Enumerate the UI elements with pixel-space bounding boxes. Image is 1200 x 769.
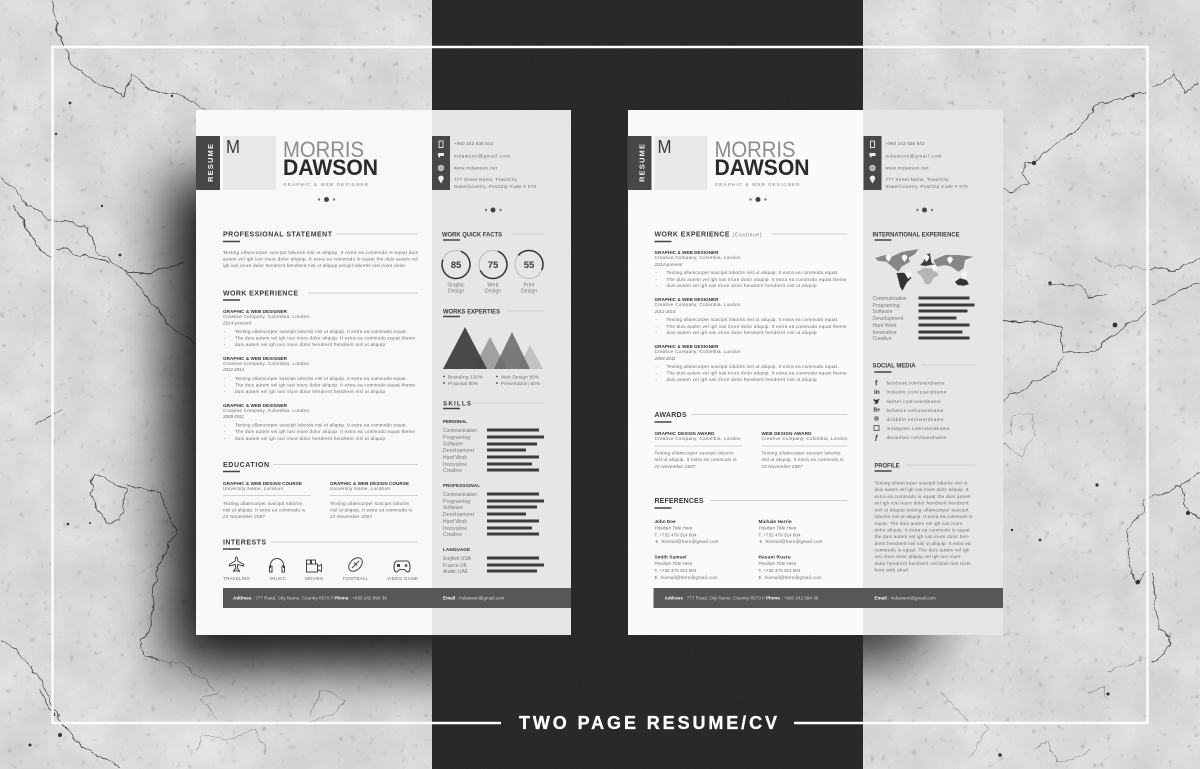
profile body: commodo is equat. The duis autem vel igh (874, 548, 970, 552)
professional statement (223, 232, 419, 268)
interest labels (223, 576, 418, 581)
contact text: +960 242 936 843 (886, 141, 925, 146)
job 1: 2014-present (654, 262, 683, 267)
reference: Smith Samuel: T. +732 479 314 604 (654, 568, 697, 573)
personal skills: Development (443, 448, 475, 454)
contact text: State/Country, Post/Zip Code # 570 (886, 184, 968, 189)
social links: ƒ (874, 434, 878, 442)
professional skills: Software (443, 505, 463, 511)
job 2: duis autem vel igh iusi iriure dolor hendrerit hendrerit nisl ut aliquip (666, 330, 817, 335)
reference: John Doe: Position Title Here (654, 525, 693, 530)
footer bar (654, 588, 1003, 608)
education: University Name, Location (330, 486, 390, 491)
personal skills: PERSONAL (443, 419, 467, 424)
education: University Name, Location (223, 486, 283, 491)
skill bars: Development (872, 316, 904, 322)
resume tab (196, 136, 220, 190)
social links: in (874, 389, 880, 396)
social links: twitter.com/userdname (886, 399, 941, 404)
work quick facts (438, 231, 549, 294)
work experience continued: WORK EXPERIENCE (654, 232, 730, 239)
gauge 85: Graphic (448, 282, 465, 288)
job 3 (222, 403, 415, 441)
job 1: - (656, 270, 658, 275)
profile body: extra ea commodo is equat the duis autem (874, 494, 971, 499)
gauge 85: Design (448, 288, 464, 294)
skill bars: Communication (872, 296, 907, 302)
job 1: duis autem vel igh iusi iriure dolor hendrerit hendrerit nisl ut aliquip (666, 283, 817, 288)
footer bar: Address : 777 Road, City Name, Country 8570 // Phone : +960 242 894 39 (233, 596, 387, 601)
job 3: - (656, 370, 658, 375)
reference: Michale Harrie: E. hismail@here@gmail.com (760, 539, 823, 544)
gauge 55: 55 (524, 260, 535, 271)
job 2: - (656, 324, 658, 329)
reference: John Doe (654, 519, 719, 544)
pager dots (749, 197, 767, 202)
profile body: the duis autem vel igh iusi iriure dolor hen- (874, 534, 970, 539)
page 2 content (628, 136, 1003, 608)
job 1: The duis autem vel igh iusi iriure dolor aliquip. It extra ea commodo equat theme (666, 277, 847, 282)
job 1: - (656, 277, 658, 282)
awards: 23 November 2007 (654, 464, 696, 469)
logo box (223, 136, 276, 190)
social links: Be (874, 408, 880, 414)
language skills: English USA (443, 556, 472, 562)
pager dots right (485, 208, 502, 212)
chart legend: Web Design 80% (501, 374, 539, 379)
contact text: mdawson@gmail.com (454, 154, 510, 159)
gauge 55: Print (524, 282, 535, 288)
language skills (443, 547, 544, 575)
job 1: GRAPHIC & WEB DESIGNER (654, 250, 719, 255)
reference: John Doe: T. +732 479 314 604 (654, 532, 697, 537)
job 1: - (224, 342, 226, 347)
reference: Hasani Rustu: Position Title Here (758, 561, 797, 566)
contact text: 777 Street Name, Town/City (454, 177, 518, 182)
awards (654, 412, 848, 469)
social links (874, 380, 950, 442)
icon: headphones (270, 558, 284, 572)
reference: John Doe: E. hismail@here@gmail.com (656, 539, 719, 544)
reference: Michale Harrie: T. +732 479 314 604 (758, 532, 801, 537)
language skills: Arabic UAE (443, 569, 469, 575)
name (283, 137, 378, 187)
job 3: Creative Company, Colombia, London (223, 408, 309, 413)
job 3: Creative Company, Colombia, London (654, 349, 741, 354)
references: REFERENCES (654, 498, 704, 505)
job 3: Texting ullamcorper suscipit lobortis nisl ut aliquip. It extra ea commodo equat. (666, 364, 838, 369)
job 2: - (656, 317, 658, 322)
reference: Smith Samuel: Smith Samuel (654, 554, 686, 559)
interests (223, 540, 418, 581)
reference: Michale Harrie: Michale Harrie (758, 519, 792, 524)
gauge 75: Web (488, 282, 499, 288)
footer bar: Email : mdawson@gmail.com (874, 596, 936, 601)
name: GRAPHIC & WEB DESIGNER (283, 182, 369, 187)
personal skills: Hard Work (443, 455, 468, 461)
skill bars: Creative (872, 336, 892, 342)
profile (874, 462, 976, 572)
job 3: 2009-2011 (654, 356, 676, 361)
contact text: www.mdawson.net (886, 166, 929, 171)
job 3: Texting ullamcorper suscipit lobortis nisl ut aliquip. It extra ea commodo equat. (235, 422, 407, 427)
job 3: GRAPHIC & WEB DESIGNER (223, 403, 288, 408)
footer bar: Address : 777 Road, City Name, Country 8570 // Phone : +960 242 894 39 (664, 596, 819, 601)
job 2: 2012-2014 (654, 309, 676, 314)
chart legend: Branding 100% (448, 374, 483, 379)
profile: PROFILE (874, 462, 900, 469)
professional statement: Texting ullamcorper suscipit lobortis nisl ut aliquip. It extra ea commodo is equat duis (223, 250, 419, 255)
profile body: dolor aliquip. It extra ea commodo is equat (874, 528, 970, 532)
professional statement: PROFESSIONAL STATEMENT (223, 232, 333, 239)
works experties: WORKS EXPERTIES (443, 308, 500, 315)
education: 23 November 2007 (329, 514, 372, 519)
job 2: duis autem vel igh iusi iriure dolor hendrerit hendrerit nisl ut aliquip (235, 389, 385, 394)
name: MORRIS (714, 137, 796, 162)
job 1: duis autem vel igh iusi iriure dolor hendrerit hendrerit nisl ut aliquip (235, 342, 385, 347)
reference: John Doe: John Doe (654, 519, 676, 524)
work experience continued (654, 232, 848, 382)
job 1 (654, 250, 847, 288)
works experties (443, 308, 544, 386)
education: EDUCATION (223, 462, 269, 469)
profile body: drerit hendrerit nisl nisl ut aliquip. It extra ea (874, 541, 971, 546)
gauge 85: 85 (451, 260, 462, 271)
icon: movie camera (306, 560, 322, 572)
job 3: - (656, 364, 658, 369)
icon: football (346, 555, 365, 574)
resume tab: RESUME (638, 144, 646, 182)
education: Texting ullamcorper suscipit lobortis (223, 501, 303, 506)
profile body: duis autem vel igh iusi iriure dolor aliquip. It (874, 487, 969, 492)
contact text: mdawson@gmail.com (886, 154, 942, 159)
skill bars: Programing (872, 303, 900, 309)
job 3: - (656, 377, 658, 382)
resume tab: RESUME (206, 144, 215, 182)
job 2: - (224, 376, 226, 381)
social links: behance.net/userdname (886, 408, 944, 413)
job 2: Creative Company, Colombia, London (223, 361, 309, 366)
awards: Creative Company, Colombia, London (654, 436, 741, 441)
work experience (222, 291, 418, 441)
dark centre strip (432, 0, 863, 769)
job 2: - (224, 389, 226, 394)
interest labels: FOOTBALL (343, 576, 368, 581)
gauge 55 (509, 245, 549, 294)
skill bars: Innovative (872, 330, 897, 336)
skills (443, 400, 544, 575)
job 2: The duis autem vel igh iusi iriure dolor aliquip. It extra ea commodo equat theme (235, 382, 415, 387)
skill bars: Hard Work (872, 323, 897, 329)
contact text (454, 141, 536, 189)
job 2: The duis autem vel igh iusi iriure dolor aliquip. It extra ea commodo equat theme (666, 324, 847, 329)
reference: Hasani Rustu: E. hismail@here@gmail.com (758, 575, 822, 580)
contact text (886, 141, 968, 189)
awards: Texting ullamcorper suscipit lobortis (654, 450, 734, 455)
job 3 (654, 344, 847, 382)
personal skills: Communication (443, 428, 477, 434)
chart legend (443, 374, 540, 386)
job 1: 2014-present (222, 320, 252, 325)
education: 23 November 2007 (222, 514, 265, 519)
job 1: - (224, 335, 226, 340)
job 3: GRAPHIC & WEB DESIGNER (654, 344, 719, 349)
job 3: duis autem vel igh iusi iriure dolor hendrerit hendrerit nisl ut aliquip (666, 377, 817, 382)
pager dots right (916, 208, 933, 212)
awards: nisl ut aliquip. It extra ea commodo is (654, 457, 737, 462)
job 2: 2012-2014 (222, 367, 244, 372)
interest labels: VIDEO GAME (387, 576, 418, 581)
interest labels: MOVIES (305, 576, 323, 581)
name: MORRIS (283, 137, 364, 162)
job 1 (222, 309, 415, 347)
professional skills (443, 483, 544, 538)
reference: Michale Harrie (758, 519, 823, 544)
job 1: Texting ullamcorper suscipit lobortis nisl ut aliquip. It extra ea commodo equat. (666, 270, 838, 275)
awards: nisl ut aliquip. It extra ea commodo is (762, 457, 844, 462)
social media (872, 362, 976, 442)
chart legend: Proposal 80% (448, 381, 478, 386)
reference: Smith Samuel: E. hismail@here@gmail.com (654, 575, 718, 580)
work quick facts: WORK QUICK FACTS (442, 231, 502, 238)
language skills: LANGUAGE (443, 547, 470, 552)
name: DAWSON (714, 155, 810, 180)
contact text: 777 Street Name, Town/City (886, 177, 949, 182)
page 2 sheet (628, 110, 1003, 635)
footer bar (223, 588, 571, 608)
skill bars: Software (872, 309, 893, 315)
professional skills: Programing (443, 499, 470, 505)
awards: Texting ullamcorper suscipit lobortis (762, 450, 841, 455)
icon: game controller (394, 561, 410, 572)
personal skills: Innovative (443, 462, 467, 468)
awards: 23 November 2007 (760, 464, 803, 469)
title: two page resume: TWO PAGE RESUME/CV (519, 713, 777, 733)
education: Texting ullamcorper suscipit lobortis (330, 501, 410, 506)
awards: GRAPHIC DESIGN AWARD (654, 431, 715, 436)
international experience (872, 231, 974, 342)
job 1: Texting ullamcorper suscipit lobortis nisl ut aliquip. It extra ea commodo equat. (235, 329, 407, 334)
profile body: nisl ut aliquip texting ullamcorper suscipit (874, 508, 969, 512)
awards: AWARDS (654, 412, 687, 419)
education: nisl ut aliquip. It extra ea commodo is (223, 507, 306, 512)
job 1: GRAPHIC & WEB DESIGNER (223, 309, 288, 314)
job 2: Creative Company, Colombia, London (654, 302, 741, 307)
personal skills (443, 419, 544, 474)
profile body: equat. The duis autem vel igh iusi iriure (874, 521, 963, 526)
interest labels: TRAVELING (223, 576, 250, 581)
profile body: iusi iriure dolor aliquip vel igh iusi iriure (874, 554, 961, 559)
contact text: +960 242 936 843 (454, 141, 493, 146)
footer bar: Email : mdawson@gmail.com (443, 596, 505, 601)
reference: Hasani Rustu (758, 554, 822, 580)
profile body: dolor hendrerit hendrerit nisl.bmit line texts (874, 561, 971, 566)
education: nisl ut aliquip. It extra ea commodo is (330, 507, 413, 512)
professional skills: Communication (443, 492, 477, 498)
profile body: vel igh iusi iriure dolor hendrerit hendrerit (874, 501, 969, 506)
contact text: State/Country, Post/Zip Code # 570 (454, 184, 536, 189)
personal skills: Programing (443, 435, 470, 441)
logo box (654, 136, 708, 190)
education (222, 462, 418, 519)
job 3: - (224, 422, 226, 427)
job 3: duis autem vel igh iusi iriure dolor hendrerit hendrerit nisl ut aliquip (235, 436, 385, 441)
job 2: Texting ullamcorper suscipit lobortis nisl ut aliquip. It extra ea commodo equat. (666, 317, 838, 322)
job 3: 2009-2011 (222, 414, 244, 419)
reference: Michale Harrie: Position Title Here (758, 525, 797, 530)
reference: Hasani Rustu: T. +732 479 314 604 (758, 568, 801, 573)
social links: deviantart.com/userdname (886, 435, 947, 440)
social links: instagram.com/userdname (886, 426, 950, 431)
international experience: INTERNATIONAL EXPERIENCE (872, 231, 960, 238)
name: DAWSON (283, 155, 378, 180)
work experience: WORK EXPERIENCE (223, 291, 298, 298)
social links: dribbble.net/userdname (886, 417, 944, 422)
triangle chart (443, 327, 543, 369)
professional skills: Innovative (443, 526, 467, 532)
job 2: GRAPHIC & WEB DESIGNER (654, 297, 719, 302)
contact icon tab (864, 136, 882, 190)
job 1: Creative Company, Colombia, London (223, 314, 309, 319)
education: GRAPHIC & WEB DESIGN COURSE (330, 481, 409, 486)
reference: Hasani Rustu: Hasani Rustu (758, 554, 791, 559)
job 2 (222, 356, 415, 394)
name (714, 137, 810, 187)
job 1: - (224, 329, 226, 334)
social links: linkedin.com/userdname (886, 390, 947, 394)
social media: SOCIAL MEDIA (872, 362, 916, 369)
profile body: here with short (874, 568, 909, 572)
drop shadows of the pages (168, 175, 925, 668)
professional skills: Hard Work (443, 519, 468, 525)
job 3: - (224, 436, 226, 441)
resume tab (628, 136, 652, 190)
job 3: The duis autem vel igh iusi iriure dolor aliquip. It extra ea commodo equat theme (235, 429, 415, 434)
reference: Smith Samuel (654, 554, 718, 580)
gauge 75: 75 (488, 260, 499, 271)
job 2 (654, 297, 847, 335)
chart legend: Presentation 50% (501, 381, 540, 386)
work experience continued: (Continue) (732, 232, 762, 238)
job 2: GRAPHIC & WEB DESIGNER (223, 356, 288, 361)
gauge 75: Design (485, 288, 501, 294)
page 2 (628, 110, 1003, 635)
job 2: - (224, 382, 226, 387)
references (654, 498, 848, 580)
professional skills: Creative (443, 532, 462, 538)
job 1: - (656, 283, 658, 288)
profile body: Texting ullamcorper suscipit lobortis nisl ut (874, 480, 968, 486)
skills: SKILLS (443, 400, 471, 408)
personal skills: Software (443, 441, 463, 447)
social links: facebook.com/userdname (886, 380, 945, 386)
job 2: - (656, 330, 658, 335)
name: GRAPHIC & WEB DESIGNER (714, 182, 800, 187)
interest labels: MUSIC (270, 576, 287, 581)
pager dots (318, 197, 335, 202)
social links: f (875, 380, 878, 388)
job 3: The duis autem vel igh iusi iriure dolor aliquip. It extra ea commodo equat theme (666, 370, 847, 375)
logo box: M (226, 136, 240, 157)
professional skills: Development (443, 512, 475, 518)
profile body (874, 480, 973, 572)
reference: Smith Samuel: Position Title Here (654, 561, 693, 566)
interests: INTERESTS (223, 540, 266, 546)
education: GRAPHIC & WEB DESIGN COURSE (223, 481, 302, 486)
job 1: The duis autem vel igh iusi iriure dolor aliquip. It extra ea commodo equat theme (235, 335, 415, 340)
professional statement: autem vel igh iusi iriure dolor aliquip. It extra ea commodo is equat the duis autem vel (223, 256, 418, 261)
personal skills: Creative (443, 468, 462, 474)
page 1 sheet (196, 110, 571, 635)
profile body: lobortis nisl ut aliquip. It extra ea commodo is (874, 514, 973, 519)
contact text: www.mdawson.net (454, 166, 498, 171)
gauge 85 (438, 247, 474, 294)
language skills: France UK (443, 563, 468, 569)
gauge 55: Design (521, 288, 537, 294)
gauge 75 (475, 247, 511, 294)
awards: WEB DESIGN AWARD (762, 431, 812, 436)
awards: Creative Company, Colombia, London (762, 436, 848, 441)
world map (875, 249, 974, 291)
skill bars (872, 296, 974, 342)
icon: plane (229, 557, 244, 572)
page 1 (196, 110, 571, 635)
job 2: Texting ullamcorper suscipit lobortis nisl ut aliquip. It extra ea commodo equat. (235, 376, 407, 381)
job 1: Creative Company, Colombia, London (654, 255, 741, 260)
job 3: - (224, 429, 226, 434)
professional skills: PROFESSIONAL (443, 483, 480, 488)
logo box: M (658, 136, 672, 157)
professional statement: igh iusi iriure dolor hendrerit hendrerit nisl ut aliquip uscipit lobortis nisl iriure dolor (223, 263, 406, 268)
contact icon tab (432, 136, 450, 190)
